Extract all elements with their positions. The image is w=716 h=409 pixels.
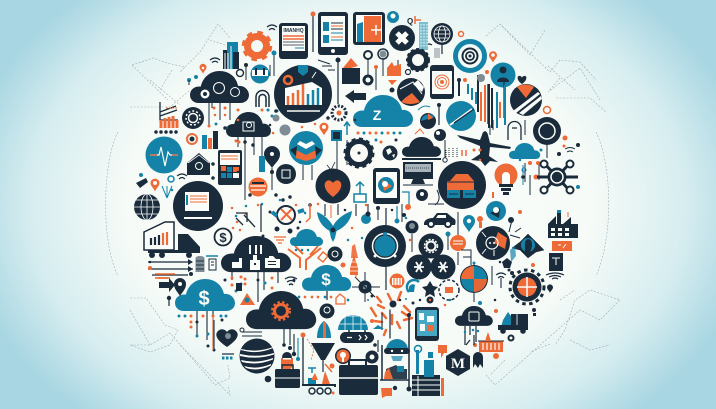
wifi icons (210, 25, 432, 62)
hexagon letter badge (446, 349, 470, 376)
stems below navy cloud (225, 272, 294, 302)
teal and orange pins right of gears (446, 212, 483, 265)
orange small icon and dots near teal cloud (274, 237, 346, 268)
navy ring under cloud (320, 304, 334, 318)
navy radial pie (476, 226, 510, 260)
teal cloud with letter: Z (373, 107, 382, 123)
wifi teal, orange stripe badge (390, 274, 419, 292)
server stack (196, 256, 218, 272)
teal cloud right (509, 143, 540, 159)
teal wing emblem (317, 205, 352, 242)
globe ball (382, 146, 398, 160)
dollar circle (214, 228, 232, 246)
gear circle (182, 107, 204, 129)
dotted arc: right (596, 132, 609, 276)
dot beside briefcase (265, 376, 271, 382)
globe (134, 194, 160, 220)
navy cloud right (455, 306, 493, 345)
dots row below teal cloud (299, 294, 348, 304)
dollar circle: $ (219, 230, 227, 245)
dashed map outline: bottom right (486, 290, 620, 385)
star and small gear ring (422, 280, 459, 304)
navy circle with teal centre (364, 208, 406, 290)
arrow and pin left (155, 278, 186, 306)
tablet with grid (218, 150, 242, 185)
pie chart right (510, 84, 542, 116)
phone with target (430, 65, 454, 99)
orange sprout cluster (365, 288, 413, 338)
tablet with teal screen (415, 307, 439, 341)
orange dots row (358, 133, 400, 142)
ghost icon (473, 352, 483, 368)
large navy circle with document (173, 181, 223, 231)
teal heartbeat circle (146, 136, 182, 174)
funnel with rocket (311, 321, 335, 372)
teal location circle and letter (387, 11, 421, 26)
navy cloud small (402, 137, 441, 160)
orange stem and dashed connector (282, 329, 314, 361)
teal tower (419, 22, 440, 58)
small navy circle (276, 164, 296, 184)
big circle with stacked panels (438, 161, 486, 209)
small icons around car (361, 204, 418, 252)
big navy circle with bar chart (274, 65, 332, 123)
dollar cloud stems (179, 311, 226, 350)
orange triangle pin (240, 293, 255, 305)
building (223, 42, 239, 69)
heart circle (316, 168, 350, 204)
navy pie badge (397, 78, 425, 106)
hexagon letter badge: M (451, 356, 465, 372)
teal small cloud (290, 229, 323, 246)
cross badge (389, 25, 415, 51)
arch icon (256, 91, 269, 107)
teal location circle and letter: Q (407, 17, 413, 26)
dashed map outline: top left (130, 24, 230, 107)
document tablet (279, 23, 308, 59)
orange tablet with plus (353, 12, 385, 45)
colored pie (460, 262, 492, 302)
teal cloud with dollar right (302, 265, 351, 300)
teal cloud with dollar (175, 279, 235, 311)
navy location pin (264, 146, 280, 190)
delivery truck with chart (144, 222, 200, 258)
navy gear large (345, 139, 373, 167)
teal disc (486, 201, 506, 221)
arch right (508, 122, 521, 140)
small heart shape (518, 76, 526, 84)
document tablet: IMANHQ (283, 28, 304, 34)
teal circle (250, 64, 270, 84)
buildings bottom (412, 345, 447, 396)
gear with orange cross (510, 270, 544, 304)
airplane (457, 131, 511, 166)
cart with people (302, 335, 335, 394)
small bars beside cloud (443, 140, 482, 162)
navy heart (216, 329, 238, 347)
orange lock (281, 352, 293, 370)
teal circle with book (289, 131, 323, 180)
target (456, 42, 484, 70)
gear ring and pins: top center (310, 12, 366, 120)
navy tag (549, 253, 563, 271)
car (424, 213, 456, 227)
monitor (403, 162, 433, 185)
dark gear badge right (508, 210, 544, 258)
orange keyhole circle (335, 348, 351, 364)
small ring and bars (186, 131, 218, 149)
dashed map outline: bottom left (130, 298, 230, 395)
small icons: left edge (136, 173, 187, 198)
navy cloud with camera (226, 112, 271, 200)
extra scattered dots (150, 120, 520, 305)
orange bulb (494, 164, 518, 195)
teal stacked pills (222, 328, 262, 358)
tablet with teal and orange icon (373, 168, 400, 204)
circuit stems right of bulb (521, 161, 540, 195)
dots and stems at lower center (366, 313, 412, 398)
orange beehive (350, 244, 358, 275)
small marks around center (402, 189, 498, 212)
orange gear (244, 32, 270, 60)
phone (318, 12, 348, 55)
arrow lines left (148, 259, 193, 278)
dotted arc: left (106, 132, 118, 276)
small chart with orange bars (156, 102, 178, 132)
teal cloud with dollar right: $ (321, 270, 331, 289)
orange pin and small icons: upper middle (259, 114, 350, 172)
vertical bar cluster (457, 70, 505, 128)
gear badge (407, 49, 429, 71)
teal dome globe (338, 315, 368, 330)
orange ring small right (490, 106, 580, 147)
orange ring (458, 32, 464, 36)
navy cloud with buildings (221, 236, 291, 272)
dots: upper left cluster (209, 108, 328, 205)
hub small (352, 272, 380, 302)
orange pin (489, 51, 497, 62)
teal cloud with dollar: $ (198, 288, 210, 310)
teal up icon (354, 182, 366, 202)
robot head (384, 339, 410, 379)
orange rail machine (465, 330, 504, 352)
orange stripe circle (248, 178, 268, 196)
triple gear circles (406, 234, 456, 280)
large briefcase lower center (339, 360, 378, 395)
small pin and ring bottom right (478, 301, 536, 359)
orange tag (552, 241, 572, 251)
globe pin (431, 23, 453, 54)
pins and small stems: upper left (187, 50, 276, 85)
delivery truck right (498, 312, 528, 334)
orange connector y shape (288, 246, 321, 270)
teal striped circle (446, 101, 476, 131)
factory (548, 210, 578, 238)
striped sphere (240, 338, 274, 374)
ring badge (533, 117, 561, 158)
envelope house (187, 153, 210, 175)
small globe icons (415, 103, 446, 141)
small wifi and dots right (540, 144, 580, 189)
gear cluster with tools, center (232, 204, 310, 247)
teal person circle (490, 62, 516, 118)
teal cloud with letter (353, 95, 413, 127)
navy cloud with orange gear (246, 291, 316, 329)
briefcase lower left (275, 365, 300, 388)
dashed map outline: top right (486, 24, 606, 112)
arrow capsule (340, 320, 374, 343)
top center pins (362, 49, 410, 92)
navy cloud with three icons (190, 71, 249, 125)
wifi and pins right (496, 246, 564, 293)
wifi navy right of stems (285, 277, 297, 285)
top center stems and wrench lines (325, 204, 370, 216)
hub gear (537, 160, 578, 194)
